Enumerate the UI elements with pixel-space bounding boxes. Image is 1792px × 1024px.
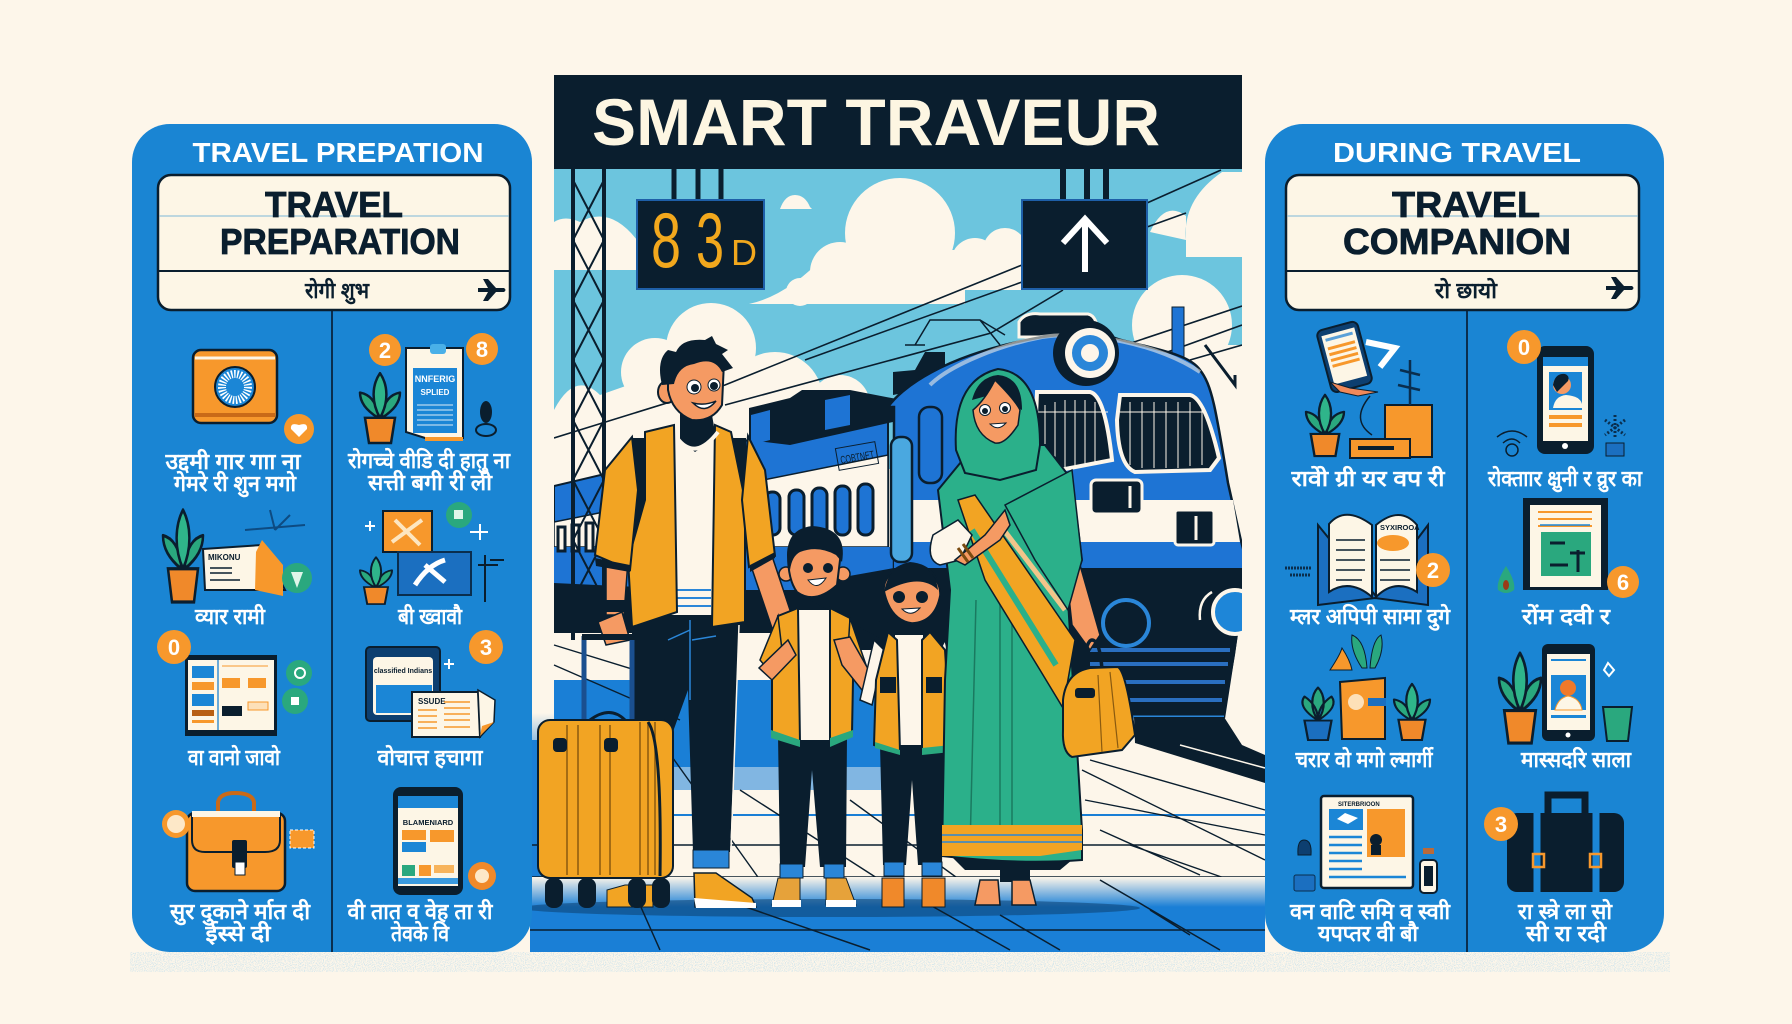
caption: सी रा रदी (1525, 920, 1607, 946)
item: phone with portrait and plant (1499, 644, 1632, 743)
item: tablet and leaflet (366, 630, 503, 737)
signboard: travel companion: COMPANION (1343, 221, 1571, 262)
roof lamp (1053, 320, 1119, 386)
caption: वी तात व वेह ता री (347, 898, 494, 924)
caption: म्लर अपिपी सामा दुगे (1289, 603, 1452, 631)
hair (660, 336, 733, 385)
forearms (1065, 560, 1100, 650)
item: tablet and leaflet: classified Indians (374, 668, 432, 675)
signboard: travel companion: रो छायो (1434, 277, 1498, 303)
caption: वोचात्त हचागा (377, 744, 484, 770)
item: framed tablet (1498, 498, 1639, 598)
badge 6 (1607, 566, 1639, 598)
item: tablet and leaflet: SSUDE (418, 697, 446, 706)
panel heading: TRAVEL PREPATION (192, 137, 484, 168)
badge 2 (1416, 553, 1450, 587)
caption (169, 898, 311, 946)
item: plant and ticket (163, 510, 312, 602)
caption: वन वाटि समि व स्वाी (1289, 898, 1451, 924)
mast (1172, 307, 1184, 367)
scarf and head (956, 369, 1040, 480)
badge 0 (157, 630, 191, 664)
badge 0: 0 (1518, 335, 1530, 360)
item: document with plant (360, 333, 498, 443)
caption: रावेो ग्री यर वप री (1290, 465, 1446, 491)
badge 0: 0 (168, 635, 180, 660)
title banner (554, 75, 1242, 169)
item: document with plant: SPLIED (421, 388, 450, 397)
clouds (554, 172, 1242, 469)
caption: वा वानो जावो (187, 744, 281, 770)
caption: रोक्ताार क्षुनी र व्रुर का (1487, 465, 1643, 493)
caption: उद्दमी गार गाा ना (164, 448, 302, 474)
arrow sign (1022, 169, 1147, 289)
badge 2: 2 (379, 338, 391, 363)
arm and hand left (606, 560, 628, 615)
caption: रोंम दवी र (1521, 603, 1611, 629)
carriage windows (558, 484, 873, 551)
item: document with plant: NNFERIG (415, 374, 455, 384)
caption (347, 447, 511, 495)
handbag (1063, 640, 1135, 757)
item: guide document (1294, 796, 1437, 893)
badge 2: 2 (1427, 558, 1439, 583)
item: smartphone: BLAMENIARD (403, 818, 454, 827)
signboard: travel companion: TRAVEL (1392, 184, 1540, 225)
panel: during travel (1265, 124, 1664, 952)
caption: तेवके वि (390, 920, 450, 946)
caption (1517, 898, 1613, 946)
caption: चरार वो मगो ल्मार्गी (1295, 746, 1435, 772)
head (779, 567, 793, 581)
skirt stripes (1090, 650, 1230, 700)
item: passport pouch (193, 350, 314, 444)
item: black suitcase (1484, 795, 1624, 892)
panel: travel preparation (132, 124, 532, 952)
caption: रा स्त्रे ला सो (1517, 898, 1613, 924)
carriage (554, 422, 889, 547)
item: guide book with plants (1302, 635, 1430, 740)
item: open book: SYXIROOA (1380, 523, 1420, 532)
badge 3: 3 (480, 635, 492, 660)
panel: central railway station scene (520, 75, 1265, 952)
caption: ईस्से दी (204, 920, 272, 946)
roof equipment (749, 390, 902, 445)
platform display board (637, 169, 764, 289)
sash (958, 495, 1075, 708)
caption (1289, 898, 1451, 946)
sky (554, 169, 1242, 469)
badge 8: 8 (476, 337, 488, 362)
lattice pylon (573, 169, 604, 640)
title: SMART TRAVEUR (592, 85, 1160, 159)
nameplate (835, 442, 879, 470)
figure: man (595, 336, 800, 908)
signboard: travel companion (1286, 175, 1639, 310)
signboard: travel preparation: TRAVEL (265, 184, 403, 225)
nameplate: COBTNET (840, 449, 875, 467)
panel heading: DURING TRAVEL (1333, 137, 1581, 168)
figure: girl (860, 562, 972, 907)
caption (347, 898, 494, 946)
figure: boy (759, 526, 880, 907)
caption: व्यार रामी (194, 603, 266, 629)
loco doors (891, 437, 912, 562)
item: open book (157, 630, 312, 736)
signboard: travel preparation: रोगी शुभ (304, 277, 370, 305)
caption: यपप्तर वी बौ (1317, 920, 1419, 946)
platform display board: 3 (696, 196, 724, 284)
item: open book (1285, 515, 1450, 605)
caption: सत्ती बगी री ली (367, 469, 493, 495)
suitcase (538, 636, 673, 908)
shirt (670, 445, 720, 615)
sleeve and hand (930, 520, 972, 565)
item: phone with photo (1497, 330, 1625, 456)
caption (164, 448, 302, 498)
item: plant and ticket: MIKONU (208, 553, 241, 562)
caption: बी ख्वावौ (397, 603, 463, 629)
caption: रोगच्चे वीडि दी हातु ना (347, 447, 511, 475)
overhead wires (554, 170, 1242, 438)
item: smartphone (393, 787, 496, 895)
item: poster and screen (360, 502, 504, 604)
windscreens (1035, 392, 1112, 470)
item: phone in hand with parcels (1306, 321, 1432, 458)
signboard: travel preparation (158, 175, 510, 310)
caption: गेमरे री शुन मगो (173, 470, 297, 498)
platform display board: D (731, 232, 757, 273)
signboard: travel preparation: PREPARATION (220, 221, 460, 262)
badge 6: 6 (1617, 570, 1629, 595)
backpack straps (642, 438, 736, 560)
locomotive body (888, 334, 1247, 717)
caption: सुर दुकाने र्मात दी (169, 898, 311, 926)
item: guide document: SITERBRIOON (1338, 802, 1380, 808)
badge 3: 3 (1495, 812, 1507, 837)
arrow (1063, 219, 1107, 272)
item: orange briefcase (162, 793, 314, 891)
jacket (628, 425, 677, 627)
small loco windows (1091, 480, 1142, 514)
sleeves and arms (760, 616, 782, 672)
caption: मास्सदरि साला (1520, 746, 1632, 772)
sari (938, 445, 1082, 862)
figure: woman in sari (930, 369, 1100, 905)
platform display board: 8 (651, 196, 681, 284)
headlamps (1103, 600, 1149, 646)
head (680, 410, 716, 452)
platform ground (520, 633, 1265, 952)
